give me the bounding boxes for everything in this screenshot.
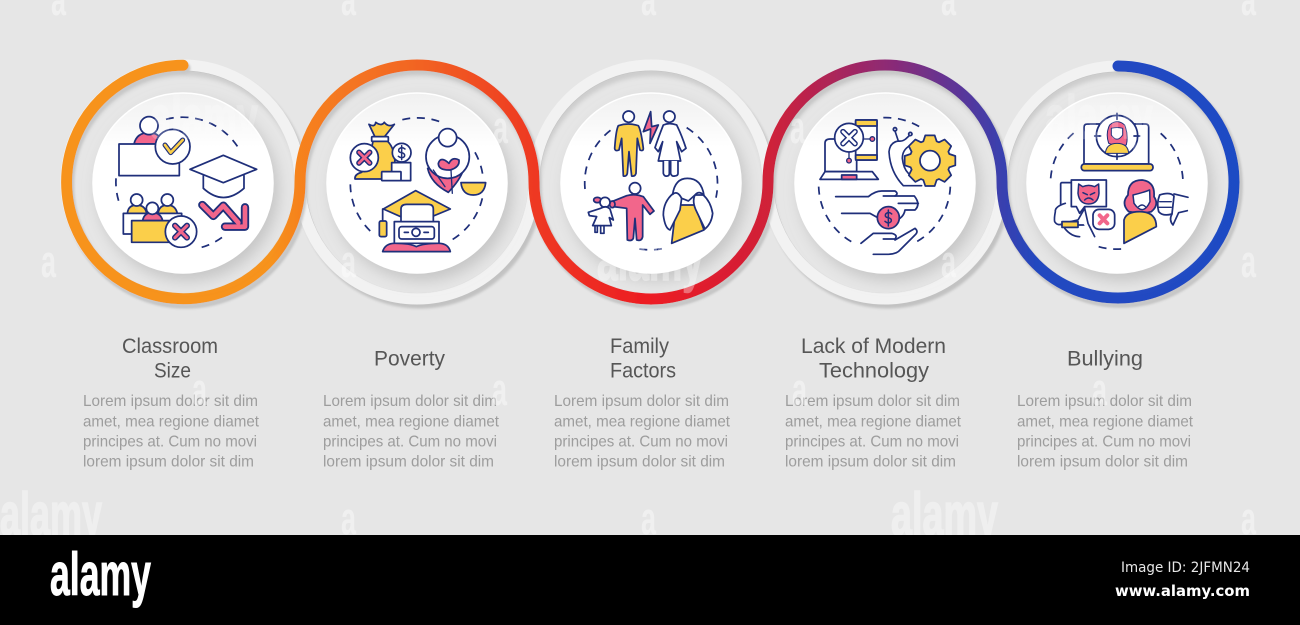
heading: classroom size: Size: [154, 358, 191, 382]
body text: principes at. Cum no movi: [83, 433, 257, 450]
ring backdrops: [66, 65, 1234, 302]
watermarks: a: [792, 364, 808, 415]
watermarks: a: [493, 102, 509, 153]
watermarks: a: [1241, 236, 1257, 287]
body text: Lorem ipsum dolor sit dim: [83, 393, 258, 410]
body text: lorem ipsum dolor sit dim: [83, 454, 254, 471]
heading: poverty: Poverty: [374, 346, 445, 370]
white disc: [561, 93, 741, 273]
body text: lorem ipsum dolor sit dim: [554, 454, 725, 471]
watermarks: alamy: [597, 226, 703, 293]
footer band: [0, 535, 1300, 625]
heading: lack of modern technology: [801, 334, 946, 382]
white disc: [1027, 93, 1207, 273]
watermarks: a: [941, 236, 957, 287]
heading: lack of modern technology: Lack of Modern: [801, 334, 946, 358]
body text: [83, 393, 260, 471]
icon: classroom size: [116, 117, 257, 247]
body text: amet, mea regione diamet: [1017, 413, 1194, 430]
body text: Lorem ipsum dolor sit dim: [1017, 393, 1192, 410]
body text: amet, mea regione diamet: [323, 413, 500, 430]
watermarks: a: [341, 493, 357, 544]
body text: Lorem ipsum dolor sit dim: [785, 393, 960, 410]
heading: classroom size: [122, 334, 218, 382]
body text: amet, mea regione diamet: [785, 413, 962, 430]
panel: family factors: [554, 93, 741, 471]
body text: lorem ipsum dolor sit dim: [785, 454, 956, 471]
watermarks: alamy: [0, 481, 102, 548]
body text: [323, 393, 500, 471]
watermarks: a: [192, 364, 208, 415]
heading: family factors: Factors: [610, 358, 676, 382]
heading: bullying: Bullying: [1067, 346, 1143, 370]
heading: family factors: [610, 334, 676, 382]
icon: bullying: [1051, 113, 1188, 249]
icon: family factors: [585, 111, 718, 250]
watermarks: a: [41, 236, 57, 287]
body text: [554, 393, 731, 471]
body text: principes at. Cum no movi: [1017, 433, 1191, 450]
watermarks: alamy: [150, 84, 258, 151]
watermarks: a: [1092, 364, 1108, 415]
panel: classroom size: [83, 93, 273, 471]
white disc: [795, 93, 975, 273]
watermarks: a: [492, 364, 508, 415]
white disc: [327, 93, 507, 273]
gradient serpentine ribbon: [67, 65, 1234, 299]
body text: principes at. Cum no movi: [554, 433, 728, 450]
icon: poverty: [350, 118, 486, 252]
body text: Lorem ipsum dolor sit dim: [554, 393, 729, 410]
body text: lorem ipsum dolor sit dim: [1017, 454, 1188, 471]
watermarks: a: [341, 236, 357, 287]
panel: bullying: [1017, 93, 1207, 471]
watermarks: a: [790, 102, 806, 153]
heading: family factors: Family: [610, 334, 669, 358]
body text: lorem ipsum dolor sit dim: [323, 454, 494, 471]
watermarks: a: [641, 493, 657, 544]
watermarks: a: [1241, 493, 1257, 544]
body text: [785, 393, 962, 471]
image id: Image ID: 2JFMN24: [1121, 560, 1250, 576]
website: www.alamy.com: [1115, 582, 1250, 600]
body text: Lorem ipsum dolor sit dim: [323, 393, 497, 410]
heading: lack of modern technology: Technology: [819, 358, 929, 382]
white disc: [93, 93, 273, 273]
panel: lack of modern technology: [785, 93, 975, 471]
body text: principes at. Cum no movi: [323, 433, 497, 450]
body text: [1017, 393, 1194, 471]
watermarks: alamy: [891, 481, 998, 548]
panel: poverty: [323, 93, 507, 471]
body text: principes at. Cum no movi: [785, 433, 959, 450]
alamy logo: alamy: [50, 541, 151, 608]
icon: lack of modern technology: [819, 118, 955, 254]
body text: amet, mea regione diamet: [554, 413, 731, 430]
heading: classroom size: Classroom: [122, 334, 218, 358]
body text: amet, mea regione diamet: [83, 413, 260, 430]
watermarks: alamy: [1045, 84, 1153, 151]
